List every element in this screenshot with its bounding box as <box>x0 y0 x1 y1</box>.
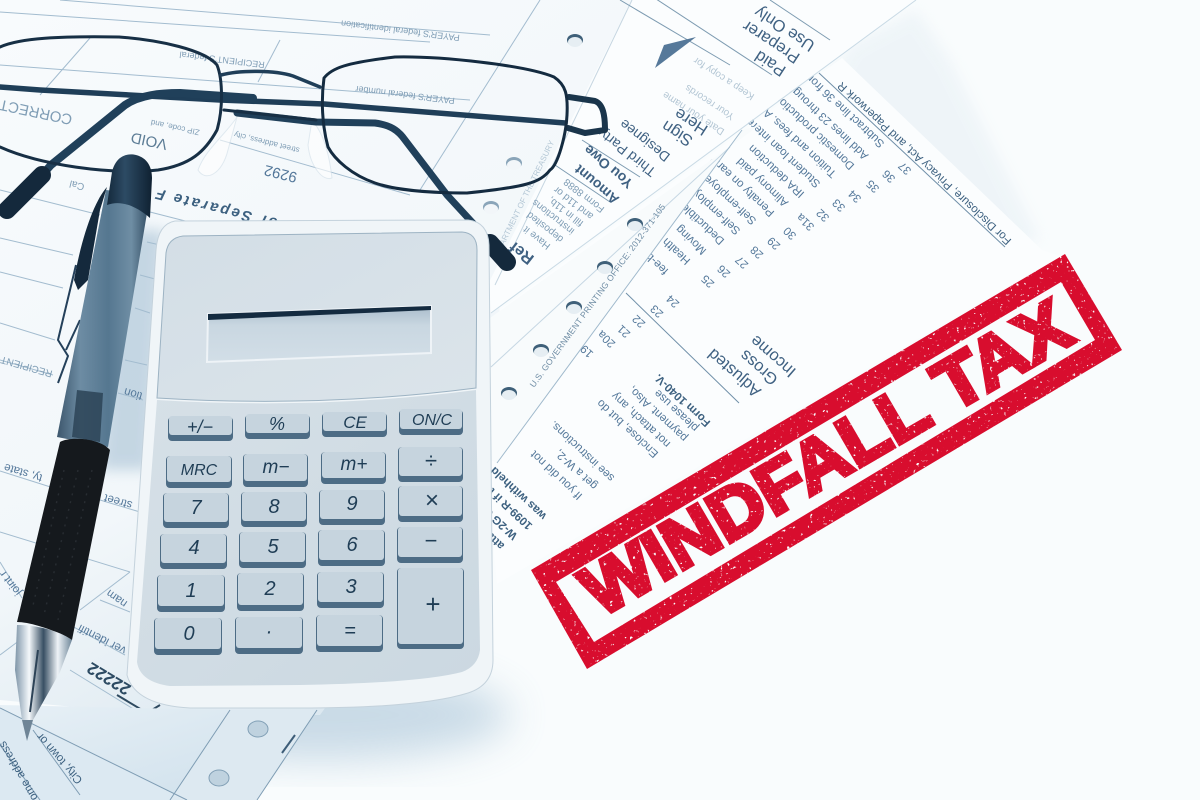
left form text: RECIPIENT'S federal <box>179 50 265 70</box>
signature form headings: Third Party <box>595 125 659 180</box>
line labels: Self-employed <box>697 168 759 227</box>
chrome tip <box>15 625 72 720</box>
key row 5 <box>157 568 464 649</box>
left form text: tion <box>123 385 144 402</box>
key row 3: 7 <box>190 497 202 519</box>
folded temple arm right <box>237 113 505 258</box>
line numbers: 28 <box>749 243 766 261</box>
line numbers: 37 <box>897 159 914 177</box>
line labels: Alimony paid <box>735 155 791 209</box>
payment instructions text: attach <box>474 520 507 552</box>
hinge <box>568 97 605 133</box>
signature form headings: Preparer <box>739 16 803 67</box>
key row 2: ÷ <box>425 448 437 473</box>
line numbers: 23 <box>649 302 666 320</box>
small signature form text: Have it <box>521 223 553 251</box>
straight temple arm <box>0 87 565 123</box>
payment instructions text: If you did not <box>528 447 585 502</box>
pen clip <box>74 187 107 290</box>
key row 5: 3 <box>345 576 357 598</box>
calculator body <box>127 220 493 708</box>
small signature form text: Keep a copy for <box>691 54 757 102</box>
key row 1: % <box>269 414 285 434</box>
signature form headings: Amount <box>571 161 622 208</box>
key row 3 <box>163 486 463 528</box>
key row 3: 8 <box>268 496 280 518</box>
paper: signature form <box>480 0 916 313</box>
stamp: windfall tax <box>531 254 1122 669</box>
line numbers: 20a <box>595 327 618 350</box>
left form text: ZIP code, and <box>150 118 200 137</box>
line numbers: 34 <box>846 187 864 205</box>
payment instructions text: see instructions. <box>548 418 617 484</box>
payment instructions text: not attach, any <box>610 389 673 450</box>
key row 6 <box>154 615 383 655</box>
key row 2 <box>166 447 463 488</box>
stamp frame <box>531 254 1122 669</box>
key row 5: 2 <box>263 578 276 600</box>
line labels: Tuition and fees. A <box>761 106 839 180</box>
line labels: IRA deduction <box>746 142 807 200</box>
rubber grip <box>17 439 110 640</box>
heading: adjusted gross income <box>704 331 800 401</box>
arrow marker <box>655 37 696 68</box>
key row 1: +/− <box>187 417 213 437</box>
perforated column text: DEPARTMENT OF THE TREASURY <box>491 138 557 261</box>
key row 4: 5 <box>267 536 279 558</box>
form text: disclosure line: For Disclosure, Privacy Act, and Paperwork R <box>836 79 1014 247</box>
line numbers: 25 <box>700 272 717 290</box>
left form text: 9292 <box>262 161 299 186</box>
ink reservoir <box>72 390 103 442</box>
key row 3: × <box>425 487 439 514</box>
left lens frame <box>0 37 222 171</box>
key row 4: − <box>425 528 437 553</box>
line labels: Moving <box>674 223 709 257</box>
right lens frame <box>322 57 567 193</box>
bracket mark <box>117 695 160 713</box>
key row 2: m+ <box>341 454 367 475</box>
upper panel <box>157 232 477 401</box>
line numbers: 22 <box>631 312 648 330</box>
line labels: Domestic production <box>772 91 857 172</box>
left form text: Cal <box>68 177 86 192</box>
paper: left form <box>0 0 632 715</box>
key row 2: MRC <box>181 462 218 479</box>
line labels: Student loan interest <box>737 108 823 190</box>
key row 6: 0 <box>183 623 195 645</box>
key row 6: · <box>266 621 272 643</box>
left form text: PAYER'S federal number <box>355 84 455 106</box>
left form text: street <box>102 491 134 511</box>
holes <box>483 34 583 214</box>
key row 1: CE <box>343 413 367 432</box>
payment instructions text: payment. Also, <box>627 383 690 444</box>
key row 4: 6 <box>346 534 358 556</box>
small signature form text: Ref <box>506 238 537 267</box>
signature form headings: You Owe <box>580 142 636 192</box>
paper: perforated strip <box>490 125 760 463</box>
line labels: Penalty on early <box>708 153 777 219</box>
line numbers: 30 <box>782 224 799 242</box>
calculator shadow <box>130 670 510 760</box>
small signature form text: instructions <box>530 196 577 236</box>
signature form headings: Here <box>671 104 711 139</box>
bridge <box>221 71 320 87</box>
pen cap <box>107 154 152 218</box>
strip print: U.S. GOVERNMENT PRINTING OFFICE: 2012-371-105 <box>528 202 667 389</box>
left form text: ver identifi <box>76 622 128 656</box>
payment instructions text: W-2G o <box>483 506 520 542</box>
folded temple arm left <box>8 93 253 213</box>
stamp text: WINDFALL TAX <box>568 285 1085 632</box>
holes <box>209 721 268 786</box>
form rule lines <box>626 73 1005 403</box>
line numbers: 19 <box>579 342 596 360</box>
key row 4: 4 <box>188 537 200 559</box>
key row 2: m− <box>263 457 289 478</box>
line numbers: 33 <box>831 196 848 214</box>
signature form headings: Designee <box>616 116 673 165</box>
small signature form text: fill in 11b, <box>546 194 586 228</box>
lower text: City, town or <box>35 730 85 786</box>
signature form headings: Paid <box>752 47 789 80</box>
payment instructions text: get a W-2, <box>553 447 600 492</box>
left form text <box>0 18 460 699</box>
heading: adjusted gross income: Income <box>747 331 800 381</box>
left form rule lines <box>0 0 540 710</box>
line numbers: 36 <box>881 167 898 185</box>
line labels: Add lines 23 through <box>786 81 871 162</box>
shade beside pen <box>100 230 165 470</box>
left form text: ut or Separate F <box>154 185 304 238</box>
display screen <box>207 306 431 362</box>
payment instructions text: 1099-R if t <box>487 485 535 532</box>
key row 3: 9 <box>346 493 358 515</box>
small signature form text: Your records <box>683 82 737 122</box>
left form text: nam <box>105 587 130 609</box>
strip holes <box>501 218 643 400</box>
lower panel <box>137 390 480 686</box>
line numbers: 32 <box>815 206 832 224</box>
key row 4 <box>160 527 463 569</box>
line numbers: 35 <box>865 177 882 195</box>
calculator <box>127 220 493 708</box>
signature form headings <box>571 2 818 208</box>
keys <box>154 409 464 655</box>
line labels <box>644 68 887 277</box>
left form text: VOID <box>129 128 169 153</box>
paper: main tax form <box>474 10 1060 584</box>
payment instructions text <box>474 371 713 552</box>
payment instructions text: Enclose, but do <box>595 397 661 460</box>
line labels: Deductible <box>679 201 727 247</box>
signature form headings: Use Only <box>751 2 818 55</box>
line labels: fee-b <box>644 250 671 277</box>
heading: adjusted gross income: Adjusted <box>704 345 765 401</box>
pen <box>15 154 152 741</box>
small signature form text: Form 8888 <box>562 176 607 214</box>
line numbers: 27 <box>734 253 751 271</box>
heading: adjusted gross income: Gross <box>737 346 782 389</box>
small signature form text <box>506 54 757 267</box>
nose pads <box>198 117 332 179</box>
payment instructions text: was withheld <box>489 464 550 522</box>
line numbers: 26 <box>716 262 733 280</box>
left form text: 22222 <box>84 658 134 699</box>
key row 1: ON/C <box>412 412 452 429</box>
small signature form text: and 11d or <box>551 183 596 221</box>
key row 5: + <box>425 589 441 619</box>
line numbers: 21 <box>616 322 633 340</box>
small signature form text: Date your name <box>661 88 727 137</box>
line labels: Health <box>661 235 693 267</box>
left form text: street address, city <box>233 130 300 155</box>
paper: lower strip <box>0 705 317 800</box>
line numbers: 24 <box>664 292 682 310</box>
line numbers <box>579 159 914 360</box>
line labels: Self-employed <box>681 178 743 237</box>
pen barrel <box>57 190 150 447</box>
line numbers: 31a <box>794 210 817 233</box>
eyeglasses <box>0 37 605 262</box>
dark strip mark <box>282 735 295 753</box>
left form text: ty, state <box>3 461 44 484</box>
left form text: PAYER'S federal identification <box>340 18 460 43</box>
key row 5: 1 <box>185 580 197 602</box>
payment instructions text: please use <box>652 387 701 434</box>
line numbers: 29 <box>766 234 783 252</box>
form rules <box>555 0 830 202</box>
signature form headings: Sign <box>659 117 696 150</box>
key row 6: = <box>344 620 356 642</box>
small signature form text: deposited <box>525 209 566 244</box>
key row 1 <box>168 409 463 441</box>
payment instructions text: Form 1040-V. <box>653 371 713 429</box>
line labels: Subtract line 36 from <box>801 68 887 150</box>
